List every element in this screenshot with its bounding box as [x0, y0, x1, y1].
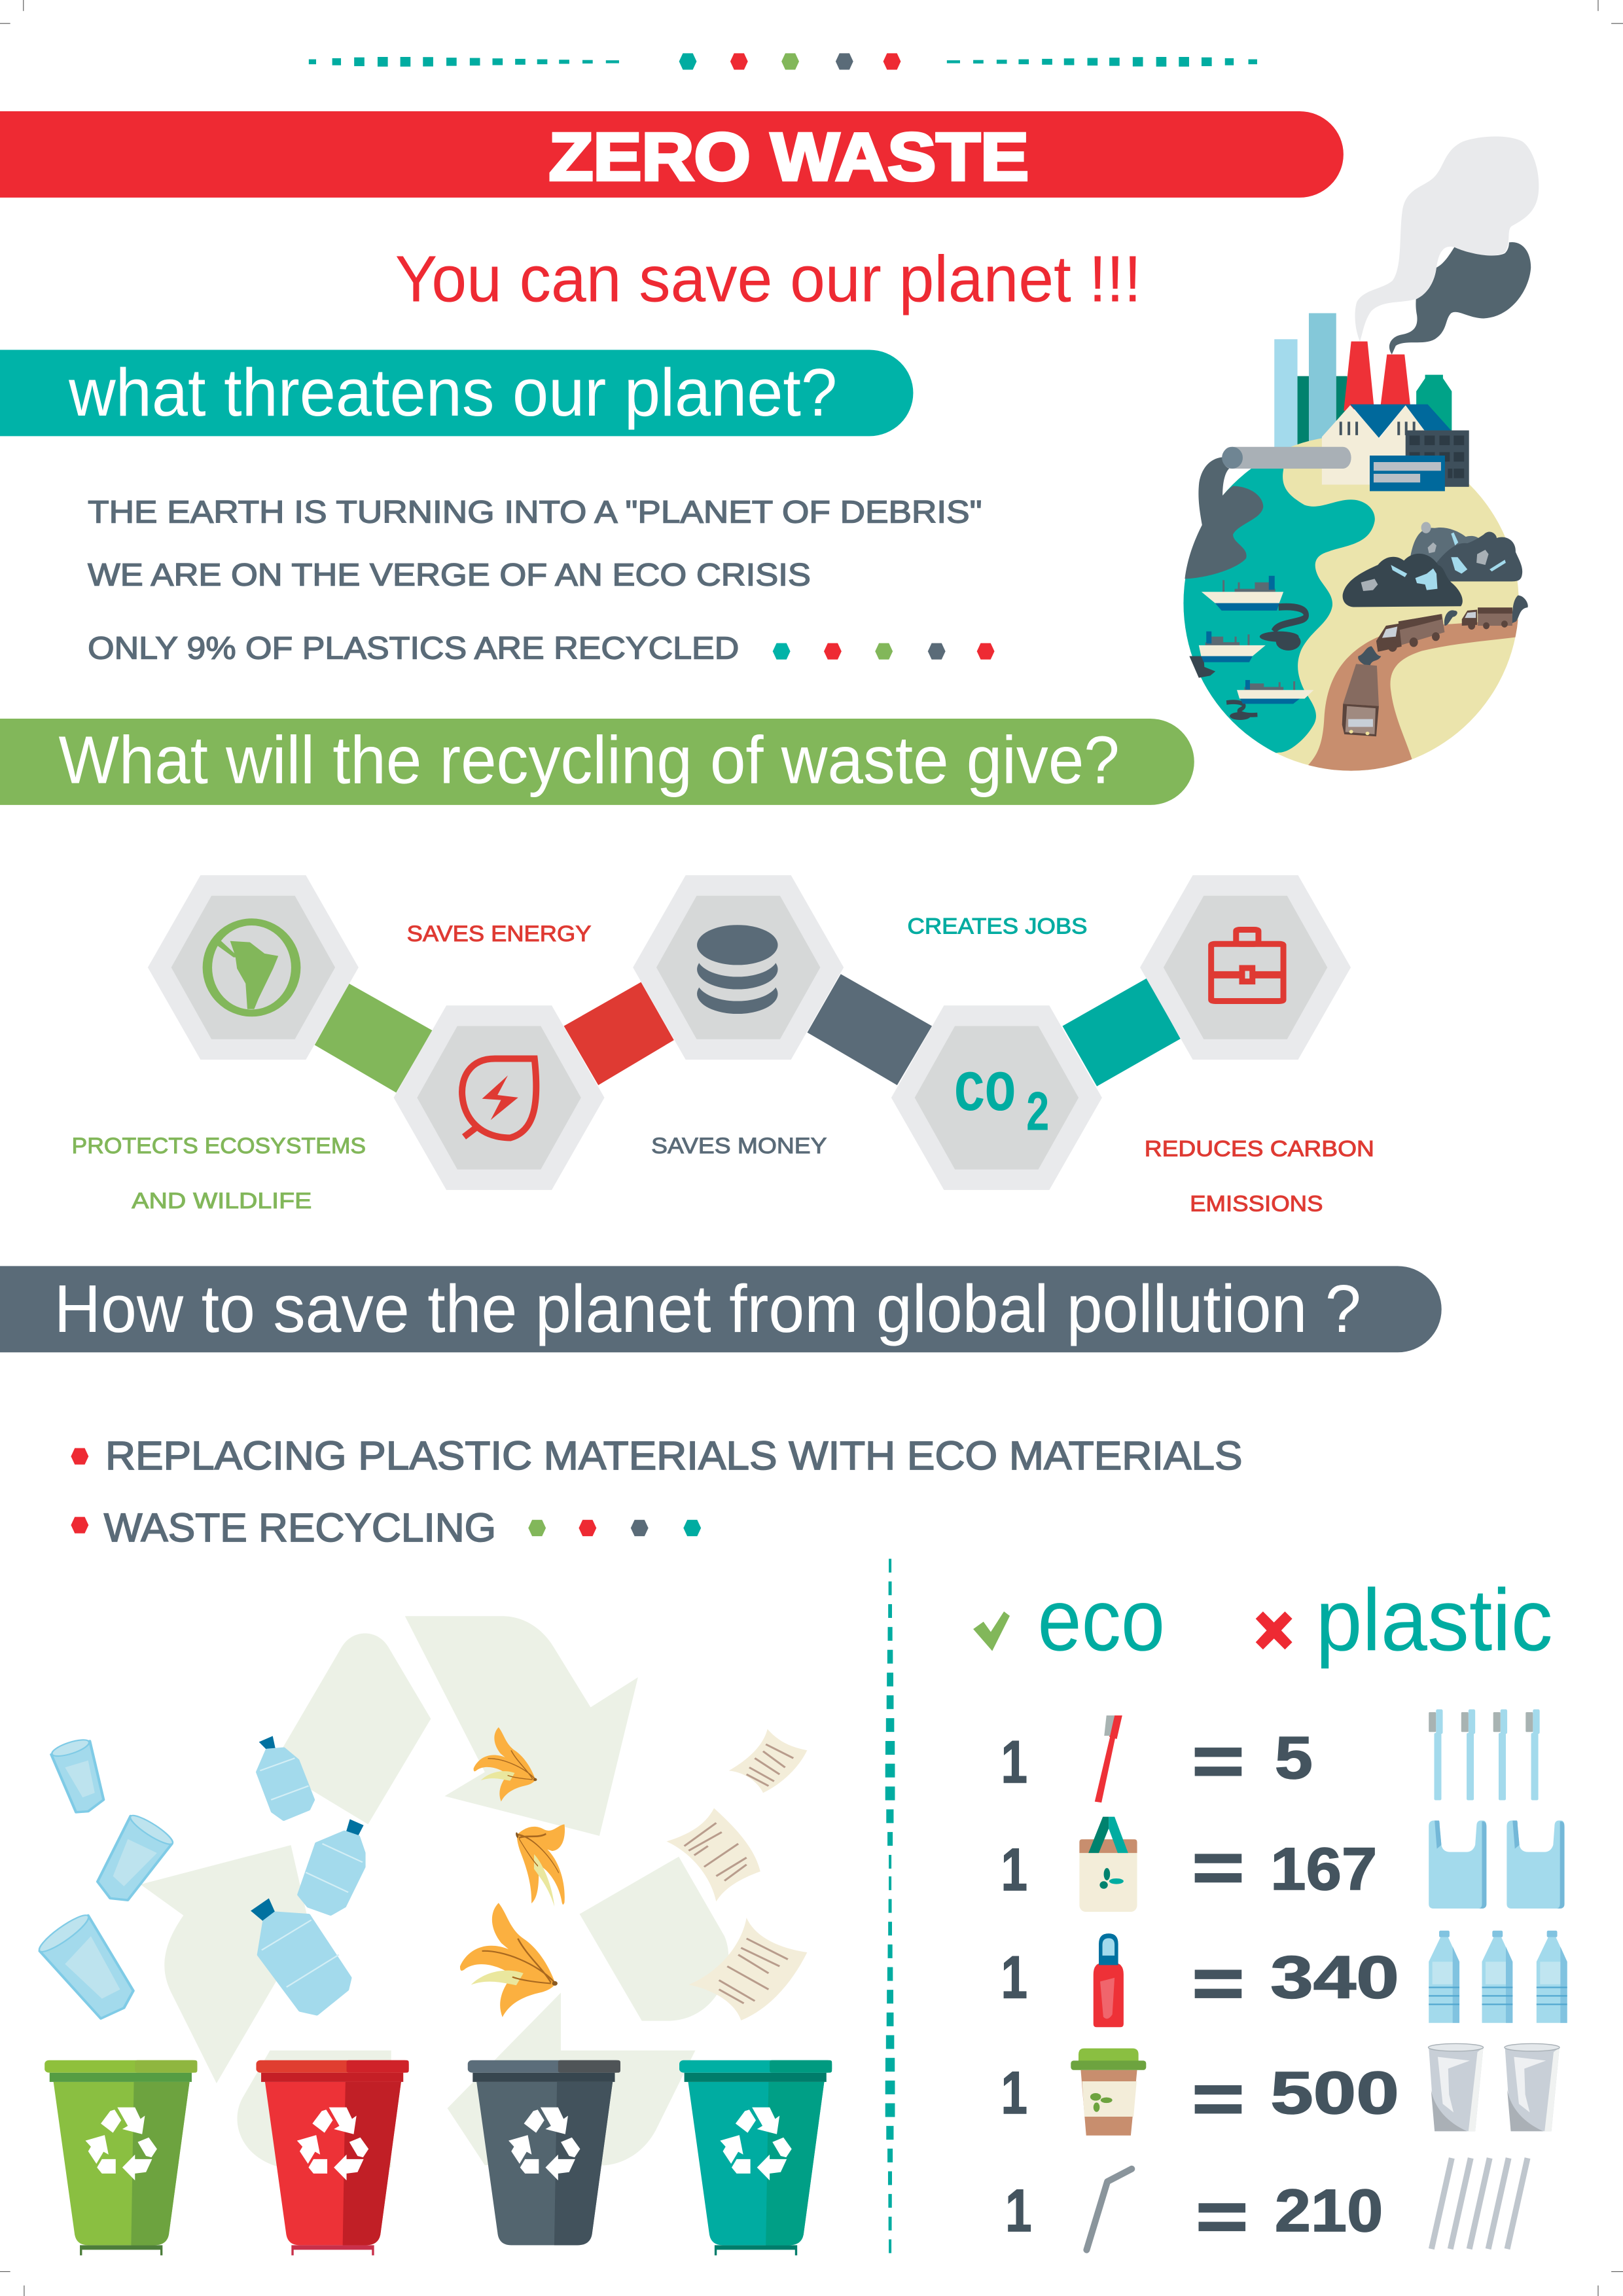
threats text block: ONLY 9% OF PLASTICS ARE RECYCLED	[88, 630, 739, 666]
comparison numbers: 1	[1001, 1729, 1027, 1796]
solutions list	[71, 1433, 1243, 1551]
heading: recycling benefits: What will the recycling of waste give?	[58, 722, 1120, 797]
smoke	[1355, 137, 1539, 355]
pollution outflow	[1185, 457, 1263, 579]
comparison numbers: 1	[1001, 1944, 1027, 2011]
benefit labels: AND WILDLIFE	[132, 1189, 312, 1213]
benefit labels: CREATES JOBS	[907, 914, 1088, 939]
pipe	[1222, 447, 1351, 469]
icon: plastic straws	[1431, 2158, 1527, 2249]
hexagon 4: reduces carbon	[891, 1005, 1102, 1190]
benefit labels: PROTECTS ECOSYSTEMS	[72, 1134, 366, 1158]
waste sorting illustration	[35, 1616, 832, 2255]
comparison numbers: 210	[1275, 2178, 1383, 2244]
benefit labels	[72, 914, 1374, 1216]
bin teal	[679, 2060, 832, 2255]
comparison numbers: 1	[1005, 2178, 1032, 2244]
solutions list: WASTE RECYCLING	[104, 1505, 496, 1551]
comparison header: plastic	[1315, 1571, 1553, 1669]
subtitle: You can save our planet !!!	[395, 243, 1141, 316]
comparison numbers: 5	[1275, 1725, 1313, 1791]
recycle arrows background	[141, 1616, 728, 2168]
icon: reusable cup	[1071, 2049, 1146, 2136]
comparison numbers	[1001, 1725, 1399, 2244]
hexagon 4: reduces carbon: CO	[954, 1063, 1016, 1128]
hexagon 2: saves energy	[394, 1005, 605, 1190]
banana peels	[460, 1727, 582, 2017]
ships and oil	[1189, 576, 1313, 720]
icon: plastic bags	[1429, 1820, 1565, 1909]
icon: plastic cups	[1429, 2043, 1560, 2131]
connectors	[315, 974, 1181, 1092]
benefit labels: SAVES MONEY	[651, 1134, 827, 1158]
bin slate	[468, 2060, 620, 2245]
title banner	[0, 111, 1344, 198]
bin green	[45, 2060, 197, 2255]
factory	[1322, 404, 1469, 491]
comparison header: eco	[1038, 1571, 1165, 1669]
icon: red toothbrush	[1095, 1715, 1122, 1803]
comparison header	[973, 1571, 1553, 1669]
comparison numbers: 500	[1270, 2060, 1399, 2126]
bin red	[256, 2060, 409, 2255]
comparison icons	[1071, 1710, 1567, 2250]
threats text block	[88, 494, 995, 666]
hexagon 3: saves money	[633, 875, 844, 1060]
trucks	[1342, 596, 1528, 736]
threats text block: WE ARE ON THE VERGE OF AN ECO CRISIS	[88, 557, 811, 592]
planet illustration	[1177, 137, 1539, 782]
comparison numbers: 1	[1001, 1837, 1027, 1903]
paper	[667, 1729, 807, 2020]
benefit labels: SAVES ENERGY	[407, 922, 591, 946]
solutions list: REPLACING PLASTIC MATERIALS WITH ECO MATERIALS	[105, 1433, 1243, 1479]
title banner: ZERO WASTE	[549, 119, 1029, 194]
icon: reusable bottle	[1094, 1933, 1124, 2027]
hexagon 4: reduces carbon: 2	[1025, 1083, 1050, 1147]
benefit labels: EMISSIONS	[1190, 1191, 1323, 1216]
icon: cloth bag	[1079, 1817, 1137, 1912]
hexagon 5: creates jobs	[1140, 875, 1351, 1060]
top ornament: dashes and dots	[309, 53, 1257, 69]
icon: cross	[1256, 1611, 1293, 1649]
factory towers	[1274, 313, 1452, 448]
heading: how to save: How to save the planet from global pollution ?	[54, 1271, 1361, 1346]
benefit labels: REDUCES CARBON	[1145, 1137, 1374, 1162]
threats text block: THE EARTH IS TURNING INTO A "PLANET OF DEBRIS"	[88, 494, 982, 529]
comparison numbers: 1	[1001, 2060, 1027, 2126]
plastic cups	[35, 1736, 177, 2018]
plastic bottles	[251, 1736, 364, 2014]
globe body	[1183, 436, 1519, 771]
icon: metal straw	[1086, 2169, 1132, 2250]
garbage piles	[1343, 522, 1522, 607]
icon: plastic toothbrushes	[1429, 1710, 1540, 1801]
hexagon 1: protects ecosystems	[148, 875, 359, 1060]
comparison numbers: 340	[1270, 1944, 1399, 2011]
comparison numbers: 167	[1270, 1836, 1377, 1903]
icon: plastic bottles	[1429, 1931, 1567, 2023]
benefits hexagon chain	[148, 875, 1351, 1190]
icon: check	[973, 1611, 1010, 1651]
heading: threats: what threatens our planet?	[68, 355, 837, 430]
